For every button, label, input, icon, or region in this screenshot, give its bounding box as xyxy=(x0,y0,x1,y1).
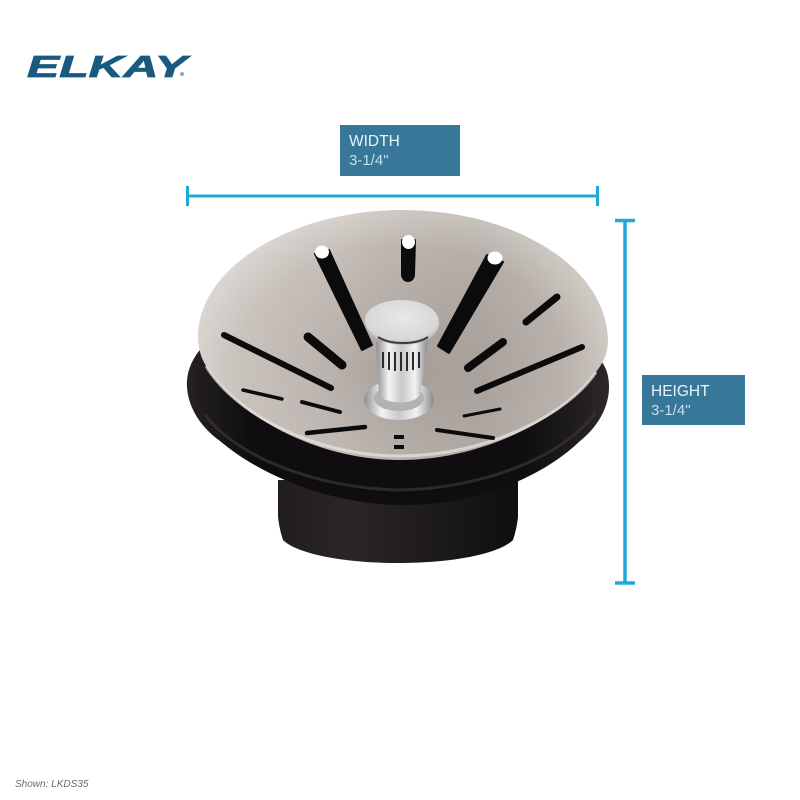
logo: Elkay: ELKAY xyxy=(27,49,192,84)
callout: width: 3-1/4" xyxy=(349,152,389,169)
rubber gasket xyxy=(187,345,609,505)
callout: height: 3-1/4" xyxy=(651,402,691,419)
logo: Elkay xyxy=(27,49,192,84)
chrome knob xyxy=(364,300,439,420)
stainless basket xyxy=(198,210,608,460)
footer note: Shown: LKDS35 xyxy=(15,779,89,790)
callout: width xyxy=(340,125,460,176)
dimension arrow: height xyxy=(615,220,635,584)
callout: height xyxy=(642,375,745,425)
gasket groove xyxy=(205,412,596,490)
black tube xyxy=(278,480,518,563)
basket slots xyxy=(315,240,503,353)
callout: height: HEIGHT xyxy=(651,383,710,400)
slot highlights xyxy=(315,235,502,264)
callout: width: WIDTH xyxy=(349,133,400,150)
dimension arrow: width xyxy=(187,186,598,206)
product: drain strainer xyxy=(187,210,609,563)
